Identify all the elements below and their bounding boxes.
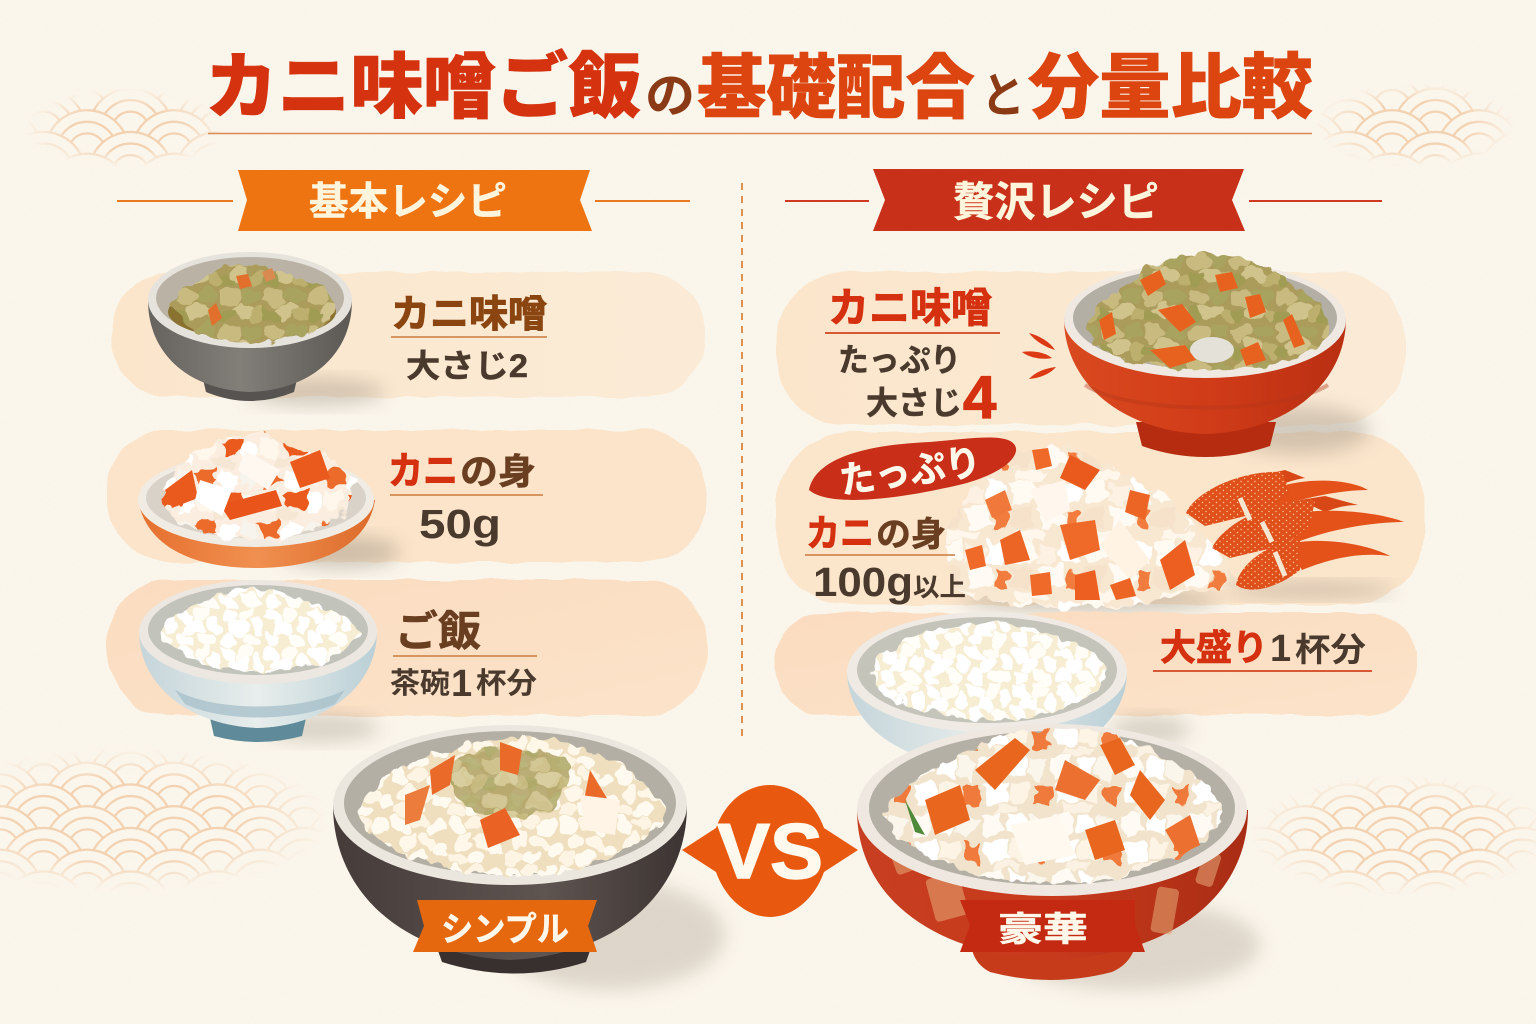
amount: generous 4 tablespoons <box>838 342 997 431</box>
icon: orange shallow bowl with crab meat <box>138 433 400 568</box>
amount: 100g or more <box>813 559 966 605</box>
amount: one large serving: 杯分 <box>1295 631 1366 668</box>
panel: basic rice <box>107 580 707 742</box>
amount: 50g: 50g <box>419 501 501 547</box>
crab meat pile <box>945 444 1238 610</box>
label ribbon: luxurious <box>960 900 1145 952</box>
panel: luxury rice <box>775 612 1417 768</box>
emphasis marks <box>1022 333 1056 379</box>
heading ribbon: basic recipe: 基本レシピ <box>309 181 507 224</box>
ingredient name: crab meat: カニ <box>388 451 458 493</box>
label ribbon: simple: シンプル <box>441 911 569 949</box>
VS badge: VS <box>717 807 823 895</box>
heading ribbon: luxury recipe: 贅沢レシピ <box>953 179 1159 225</box>
label ribbon: luxurious: 豪華 <box>998 911 1088 949</box>
center dashed divider <box>741 183 743 736</box>
callout: generous: たっぷり <box>837 441 983 502</box>
amount: 100g or more: 以上 <box>913 572 966 602</box>
final bowl: luxurious <box>857 724 1260 990</box>
icon: blue bowl with rice <box>139 580 380 742</box>
ingredient name: crab meat: カニ <box>806 513 874 554</box>
heading ribbon: basic recipe <box>117 170 690 231</box>
ingredient name: crab meat <box>806 513 946 554</box>
label ribbon: simple <box>413 900 597 952</box>
decorative wave pattern bottom left <box>0 752 318 888</box>
final bowl: simple <box>333 725 725 990</box>
VS badge <box>682 785 858 917</box>
ingredient name: crab miso: カニ味噌 <box>391 294 547 336</box>
panel: basic crab meat <box>107 430 706 568</box>
ingredient name: crab meat: の身 <box>876 516 946 554</box>
icon: blue bowl with large serving of rice <box>847 612 1190 768</box>
title: 分量比較 <box>1028 49 1313 128</box>
ingredient name: crab miso: カニ味噌 <box>828 285 992 331</box>
ingredient name: rice: ご飯 <box>395 608 481 655</box>
amount: 100g or more: 100g <box>813 559 913 605</box>
title: カニ味噌ご飯 <box>205 48 641 128</box>
decorative wave pattern top left <box>32 90 218 166</box>
panel: luxury crab meat <box>775 432 1425 610</box>
panel: basic crab miso <box>111 252 705 406</box>
amount: generous 4 tablespoons: たっぷり <box>838 342 961 378</box>
panel: luxury crab miso <box>777 254 1405 457</box>
ingredient name: crab meat: の身 <box>460 451 536 492</box>
amount: one large serving: 大盛り <box>1160 627 1268 668</box>
amount: one rice bowl <box>390 663 537 705</box>
amount: generous 4 tablespoons: 大さじ <box>866 385 962 421</box>
title: 基礎配合 <box>697 49 975 127</box>
title: と <box>981 70 1025 123</box>
ingredient name: crab meat <box>388 451 536 493</box>
amount: 2 tablespoons: 大さじ2 <box>406 348 528 384</box>
title <box>205 48 1313 128</box>
icon: crab claws <box>1186 470 1404 598</box>
amount: generous 4 tablespoons: 4 <box>963 364 997 431</box>
amount: one rice bowl: 茶碗 <box>390 667 450 700</box>
decorative wave pattern top right <box>1321 86 1509 164</box>
heading ribbon: luxury recipe <box>785 169 1382 231</box>
amount: one rice bowl: 杯分 <box>476 667 537 700</box>
amount: one large serving <box>1160 627 1366 670</box>
icon: red bowl heaped with crab miso <box>1064 254 1370 457</box>
amount: one rice bowl: 1 <box>451 663 472 705</box>
decorative wave pattern bottom right <box>1260 778 1536 892</box>
amount: one large serving: 1 <box>1270 628 1291 670</box>
title: の <box>645 70 695 123</box>
icon: grey bowl with crab miso <box>148 252 385 406</box>
